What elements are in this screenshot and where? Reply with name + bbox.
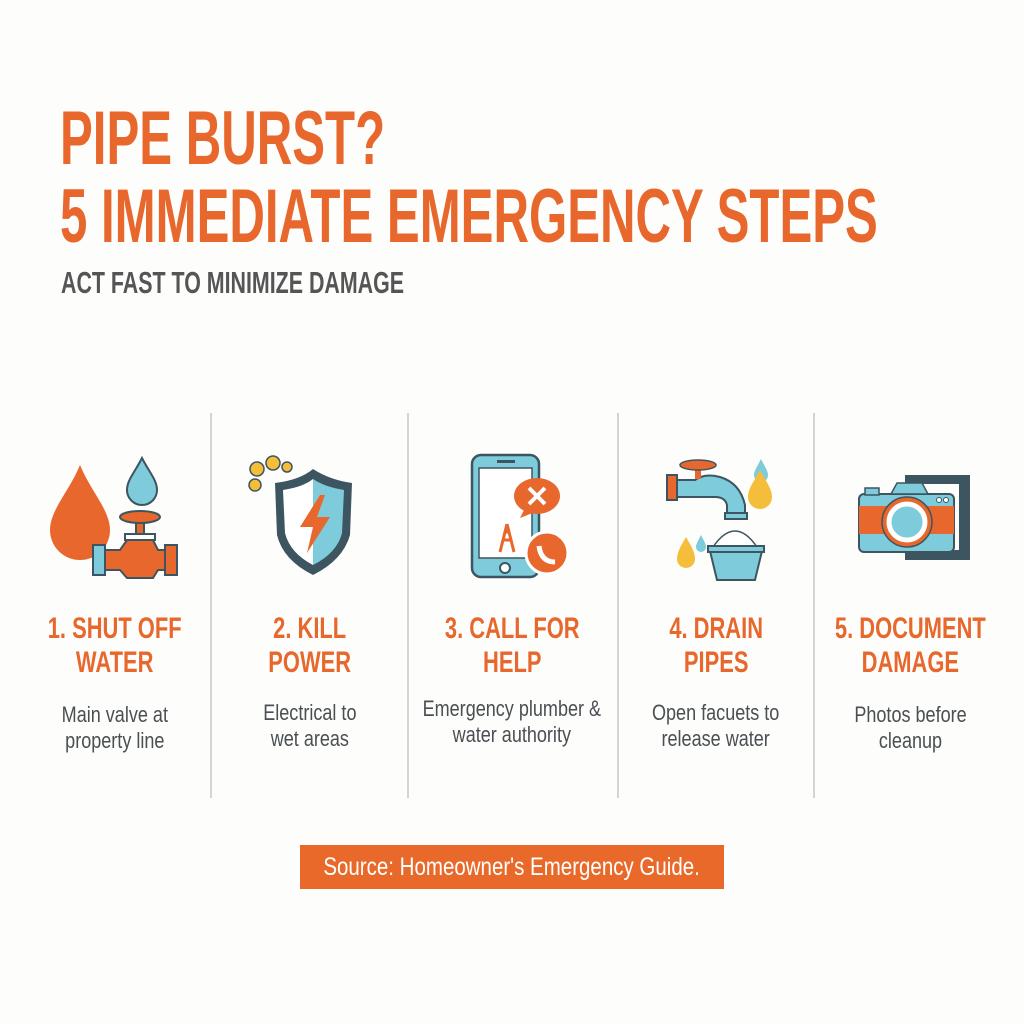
step 4: release water xyxy=(662,726,770,751)
title: 5 IMMEDIATE EMERGENCY STEPS xyxy=(60,174,878,259)
step 3: HELP xyxy=(483,646,541,679)
icon: shield xyxy=(248,455,352,575)
title xyxy=(60,96,878,259)
step 2: POWER xyxy=(269,646,351,679)
icon: faucet and bucket xyxy=(666,459,772,581)
subtitle: ACT FAST TO MINIMIZE DAMAGE xyxy=(61,265,404,300)
step 2 xyxy=(263,612,357,751)
icon: water drop and valve xyxy=(50,456,178,579)
step 3 xyxy=(423,612,601,747)
step 3: Emergency plumber & xyxy=(423,696,601,721)
step 1: WATER xyxy=(76,646,154,679)
step 3: water authority xyxy=(453,722,571,747)
step 2: wet areas xyxy=(271,726,349,751)
icon: camera xyxy=(858,475,970,560)
step 4 xyxy=(652,612,780,751)
step 2: Electrical to xyxy=(263,700,357,725)
step 1: property line xyxy=(65,728,165,753)
step 2: 2. KILL xyxy=(273,612,346,645)
title: PIPE BURST? xyxy=(60,96,385,181)
step 5: 5. DOCUMENT xyxy=(835,612,985,645)
step 5 xyxy=(835,612,986,753)
source box xyxy=(300,845,724,889)
step 3: 3. CALL FOR xyxy=(445,612,579,645)
icon: phone xyxy=(470,454,566,578)
step 1: Main valve at xyxy=(62,702,168,727)
step 5: cleanup xyxy=(878,728,942,753)
step 1: 1. SHUT OFF xyxy=(48,612,182,645)
step 5: Photos before xyxy=(854,702,966,727)
step 5: DAMAGE xyxy=(861,646,959,679)
source box: Source: Homeowner's Emergency Guide. xyxy=(324,853,700,881)
step 4: PIPES xyxy=(684,646,748,679)
step 4: 4. DRAIN xyxy=(669,612,763,645)
step 1 xyxy=(48,612,182,753)
step 4: Open facuets to xyxy=(652,700,780,725)
